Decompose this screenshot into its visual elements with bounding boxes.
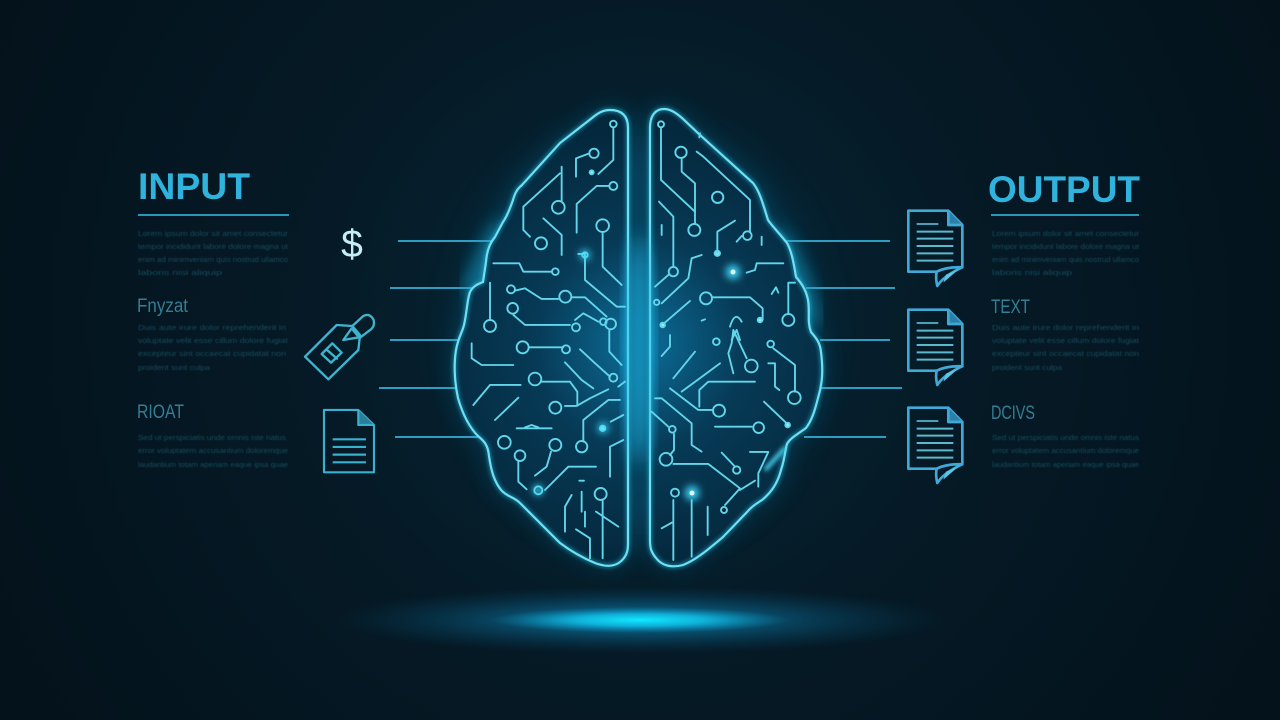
icon: output document 1 — [908, 211, 962, 286]
brain — [455, 109, 822, 566]
input subheading 2: RIOAT — [137, 402, 184, 423]
output text 3: laudantium totam aperiam eaque ipsa quae — [992, 460, 1139, 469]
output text 1: laboris nisi aliquip — [992, 268, 1072, 277]
output text 2: voluptate velit esse cillum dolore fugiat — [992, 336, 1140, 345]
output text 1 — [992, 229, 1140, 277]
right hemisphere — [650, 109, 822, 566]
output text 3: Sed ut perspiciatis unde omnis iste natus — [992, 433, 1139, 442]
input subheading 1: Fnyzat — [137, 296, 189, 317]
input text 2: Duis aute irure dolor reprehenderit in — [138, 323, 286, 332]
output heading: OUTPUT — [988, 169, 1140, 210]
icon: input document — [324, 410, 374, 472]
output text 2: Duis aute irure dolor reprehenderit in — [992, 323, 1139, 332]
output text 1: enim ad minimveniam quis nostrud ullamco — [992, 255, 1139, 264]
output rule — [991, 214, 1139, 216]
circuit: left lower — [472, 340, 625, 558]
input text 3: laudantium totam aperiam eaque ipsa quae — [138, 460, 288, 469]
input text 1: tempor incididunt labore dolore magna ut — [138, 242, 289, 251]
input text 1 — [138, 229, 289, 277]
left connector lines — [379, 241, 492, 437]
right connector lines — [786, 241, 902, 437]
output text 3 — [992, 433, 1139, 469]
glowing nodes — [533, 250, 785, 500]
input heading: INPUT — [138, 166, 250, 207]
icon: output document 3 — [908, 408, 962, 483]
output subheading 1: TEXT — [991, 297, 1030, 318]
output text 2 — [992, 323, 1140, 372]
output text 2: excepteur sint occaecat cupidatat non — [992, 349, 1139, 358]
output text 2: proident sunt culpa — [992, 363, 1063, 372]
input text 2: excepteur sint occaecat cupidatat non — [138, 349, 286, 358]
floor glow — [330, 586, 950, 654]
input text 2 — [138, 323, 289, 372]
input text 1: enim ad minimveniam quis nostrud ullamco — [138, 255, 288, 264]
circuit: right upper — [654, 121, 795, 340]
output text 1: Lorem ipsum dolor sit amet consectetur — [992, 229, 1140, 238]
input rule — [138, 214, 289, 216]
output subheading 2: DCIVS — [991, 403, 1035, 424]
input text 2: voluptate velit esse cillum dolore fugiat — [138, 336, 289, 345]
icon: dollar sign: $ — [341, 223, 363, 266]
icon: price tag — [305, 315, 374, 379]
input text 3: error voluptatem accusantium doloremque — [138, 446, 288, 455]
input text 2: proident sunt culpa — [138, 363, 211, 372]
output text 1: tempor incididunt labore dolore magna ut — [992, 242, 1140, 251]
circuit: left upper — [484, 121, 625, 340]
brain aura glow — [455, 109, 822, 566]
icon: output document 2 — [908, 310, 962, 385]
input text 3 — [138, 433, 288, 469]
output text 3: error voluptatem accusantium doloremque — [992, 446, 1139, 455]
circuit: right lower — [652, 330, 801, 560]
central glow — [627, 235, 651, 465]
input text 1: Lorem ipsum dolor sit amet consectetur — [138, 229, 289, 238]
input text 1: laboris nisi aliquip — [138, 268, 222, 277]
left hemisphere — [455, 110, 628, 566]
input text 3: Sed ut perspiciatis unde omnis iste natus — [138, 433, 286, 442]
